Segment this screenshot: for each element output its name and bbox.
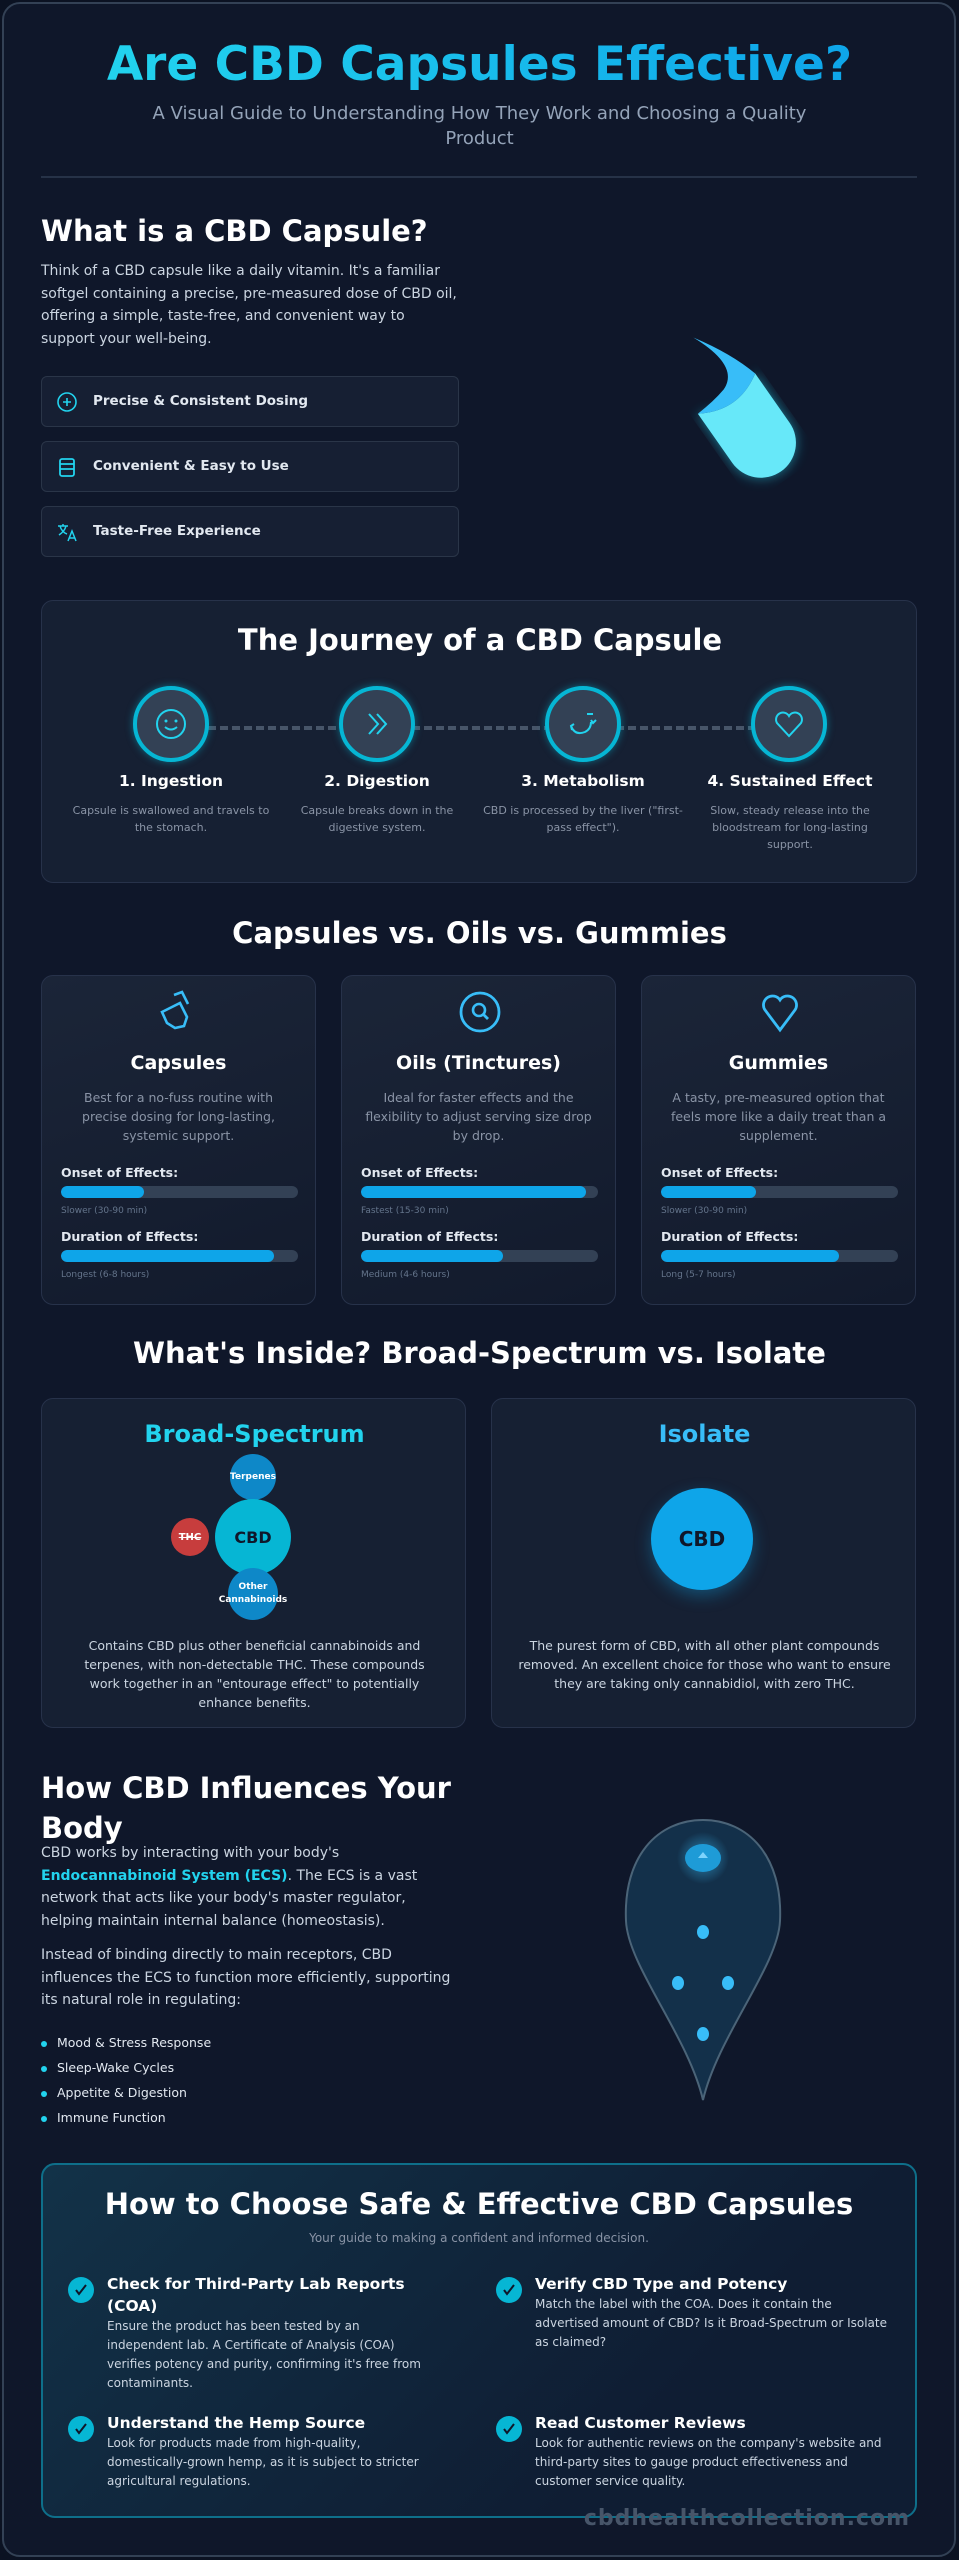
text: ECS explanation: CBD works by interacting with your body's Endocannabinoid System (ECS). The ECS is a vast network that acts like your body's master regulator, helping maintain internal balance (homeostasis). Instead of binding directly to main receptors, CBD influences the ECS to function more efficiently, supporting its natural role in regulating: bbox=[41, 1845, 450, 2008]
panel: journey bbox=[41, 600, 917, 883]
diagram: broad-spectrum compounds: THC bbox=[179, 1532, 201, 1542]
card: oils: Medium (4-6 hours) bbox=[361, 1270, 450, 1280]
list: regulated functions: Mood & Stress Response bbox=[57, 2035, 211, 2050]
panel: journey: 3. Metabolism bbox=[521, 772, 645, 790]
step labels: Capsule is swallowed and travels to the stomach. bbox=[73, 804, 269, 834]
card: capsules: Slower (30-90 min) bbox=[61, 1206, 147, 1216]
card: oils bbox=[341, 975, 616, 1305]
intro text: Think of a CBD capsule like a daily vitamin. It's a familiar softgel containing a precise, pre-measured dose of CBD oil, offering a simple, taste-free, and convenient way to support your well-being. bbox=[41, 263, 457, 346]
card: oils: Ideal for faster effects and the flexibility to adjust serving size drop by drop. bbox=[365, 1090, 592, 1143]
card: capsules: Onset of Effects: bbox=[61, 1165, 178, 1180]
item: potency: Verify CBD Type and Potency bbox=[535, 2275, 787, 2293]
panel: journey: Capsule breaks down in the digestive system. bbox=[301, 804, 453, 834]
diagram: broad-spectrum compounds: CBD bbox=[234, 1528, 272, 1546]
card: gummies bbox=[641, 975, 916, 1305]
card: gummies: Gummies bbox=[729, 1052, 828, 1074]
diagram: broad-spectrum compounds bbox=[171, 1454, 291, 1620]
item: COA: Ensure the product has been tested by an independent lab. A Certificate of Analysis (COA) verifies potency and purity, confirming it's free from contaminants. bbox=[107, 2319, 421, 2390]
item: reviews bbox=[496, 2414, 882, 2488]
heading: what's inside: What's Inside? Broad-Spectrum vs. Isolate bbox=[133, 1336, 826, 1370]
feature: dosing: Precise & Consistent Dosing bbox=[93, 393, 308, 409]
icon: capsule illustration bbox=[694, 338, 804, 486]
panel: isolate bbox=[491, 1398, 916, 1728]
illustration: body/ECS drop bbox=[624, 1819, 782, 2100]
item: COA: Check for Third-Party Lab Reports (COA) bbox=[107, 2275, 405, 2315]
panel: broad-spectrum: Contains CBD plus other beneficial cannabinoids and terpenes, with non-detectable THC. These compounds work together in an "entourage effect" to potentially enhance benefits. bbox=[84, 1638, 425, 1710]
card: gummies: A tasty, pre-measured option that feels more like a daily treat than a supplement. bbox=[671, 1090, 886, 1143]
panel: journey: 2. Digestion bbox=[324, 772, 430, 790]
panel: isolate: The purest form of CBD, with all other plant compounds removed. An excellent choice for those who want to ensure they are taking only cannabidiol, with zero THC. bbox=[518, 1638, 891, 1691]
heading: journey: The Journey of a CBD Capsule bbox=[238, 623, 722, 657]
subtitle: A Visual Guide to Understanding How They Work and Choosing a Quality Product bbox=[153, 103, 806, 149]
diagram: isolate CBD bbox=[651, 1488, 753, 1590]
diagram: broad-spectrum compounds: Terpenes bbox=[230, 1472, 276, 1482]
item: reviews: Look for authentic reviews on the company's website and third-party sites to gauge product effectiveness and customer service quality. bbox=[535, 2436, 882, 2488]
step labels: 1. Ingestion bbox=[119, 772, 223, 790]
card: gummies: Long (5-7 hours) bbox=[661, 1270, 736, 1280]
panel: broad-spectrum bbox=[41, 1398, 466, 1728]
list: regulated functions: Appetite & Digestion bbox=[57, 2085, 187, 2100]
item: potency bbox=[496, 2275, 887, 2349]
item: hemp source: Understand the Hemp Source bbox=[107, 2414, 365, 2432]
icon: capsule bbox=[160, 990, 190, 1030]
panel: journey: 4. Sustained Effect bbox=[708, 772, 872, 790]
feature: dosing bbox=[41, 376, 459, 427]
card: gummies: Onset of Effects: bbox=[661, 1165, 778, 1180]
card: capsules: Longest (6-8 hours) bbox=[61, 1270, 149, 1280]
watermark: cbdhealthcollection.com bbox=[584, 2506, 910, 2531]
item: hemp source: Look for products made from high-quality, domestically-grown hemp, as it is subject to stricter agricultural regulations. bbox=[107, 2436, 419, 2488]
icon: heart bbox=[762, 994, 798, 1032]
diagram: broad-spectrum compounds: Cannabinoids bbox=[219, 1595, 287, 1605]
card: oils: Fastest (15-30 min) bbox=[361, 1206, 449, 1216]
title: Are CBD Capsules Effective? bbox=[107, 37, 852, 92]
heading: how CBD influences: How CBD Influences Your Body bbox=[41, 1771, 451, 1845]
panel: how to choose bbox=[41, 2163, 917, 2518]
step 1 bbox=[133, 686, 209, 762]
card: gummies: Slower (30-90 min) bbox=[661, 1206, 747, 1216]
step 2 bbox=[339, 686, 415, 762]
list: regulated functions: Sleep-Wake Cycles bbox=[57, 2060, 174, 2075]
feature: convenient: Convenient & Easy to Use bbox=[93, 458, 289, 474]
card: capsules: Duration of Effects: bbox=[61, 1229, 198, 1244]
heading: comparison: Capsules vs. Oils vs. Gummies bbox=[232, 916, 727, 950]
item: potency: Match the label with the COA. Does it contain the advertised amount of CBD? Is it Broad-Spectrum or Isolate as claimed? bbox=[535, 2297, 887, 2349]
item: reviews: Read Customer Reviews bbox=[535, 2414, 746, 2432]
feature: taste-free bbox=[41, 506, 459, 557]
diagram: broad-spectrum compounds: Other bbox=[239, 1582, 267, 1592]
list: regulated functions bbox=[41, 2035, 211, 2125]
panel: broad-spectrum: Broad-Spectrum bbox=[144, 1420, 365, 1448]
feature: convenient bbox=[41, 441, 459, 492]
card: capsules: Best for a no-fuss routine with precise dosing for long-lasting, systemic support. bbox=[82, 1090, 275, 1143]
card: oils: Oils (Tinctures) bbox=[396, 1052, 561, 1074]
panel: isolate: Isolate bbox=[659, 1420, 750, 1448]
card: oils: Onset of Effects: bbox=[361, 1165, 478, 1180]
card: capsules bbox=[41, 975, 316, 1305]
panel: journey: CBD is processed by the liver ("first-pass effect"). bbox=[483, 804, 683, 834]
step 4 bbox=[751, 686, 827, 762]
panel: journey: Slow, steady release into the bloodstream for long-lasting support. bbox=[710, 804, 870, 851]
icon: search bbox=[460, 992, 500, 1032]
step 3 bbox=[545, 686, 621, 762]
card: gummies: Duration of Effects: bbox=[661, 1229, 798, 1244]
step labels bbox=[73, 772, 269, 834]
card: capsules: Capsules bbox=[131, 1052, 226, 1074]
card: oils: Duration of Effects: bbox=[361, 1229, 498, 1244]
feature: taste-free: Taste-Free Experience bbox=[93, 523, 261, 539]
diagram: isolate CBD: CBD bbox=[679, 1527, 725, 1551]
item: hemp source bbox=[68, 2414, 419, 2488]
item: COA bbox=[68, 2275, 421, 2390]
heading: how to choose: How to Choose Safe & Effective CBD Capsules bbox=[105, 2187, 853, 2221]
panel: how to choose: Your guide to making a confident and informed decision. bbox=[309, 2231, 649, 2245]
list: regulated functions: Immune Function bbox=[57, 2110, 166, 2125]
heading: what is a CBD capsule: What is a CBD Capsule? bbox=[41, 214, 428, 248]
